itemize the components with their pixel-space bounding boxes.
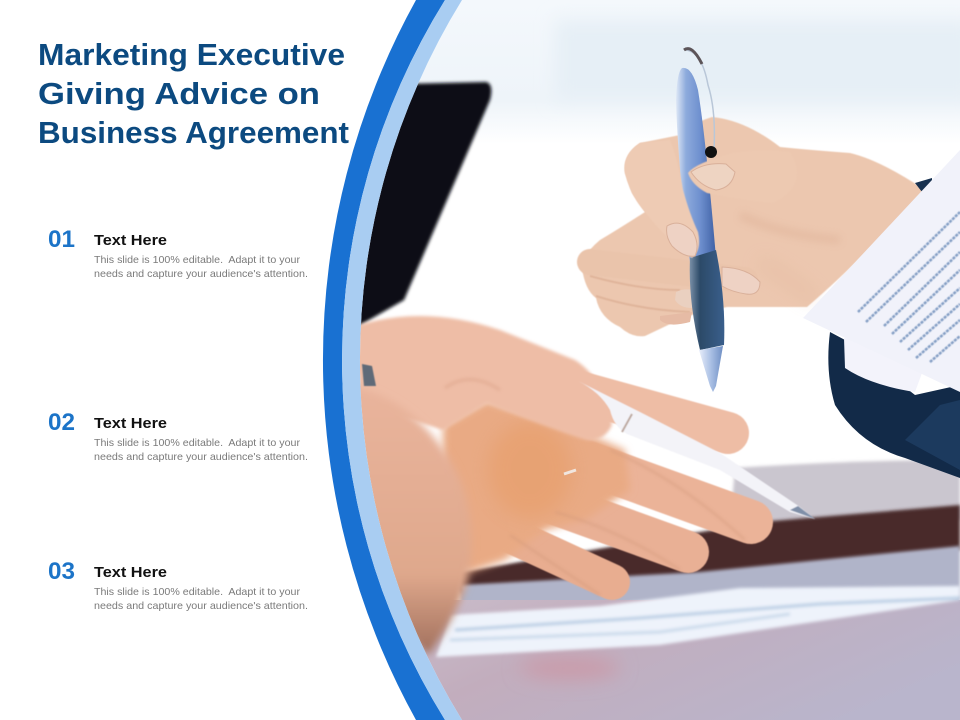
description 03: needs and capture your audience's attention. <box>94 600 308 612</box>
description 03 <box>94 586 308 612</box>
description 01 <box>94 254 308 280</box>
description 01: This slide is 100% editable. Adapt it to your <box>94 254 300 266</box>
list item 02 <box>48 409 308 463</box>
laptop screen <box>355 82 491 328</box>
wrist side <box>360 389 474 658</box>
description 02 <box>94 437 308 463</box>
curved blue band <box>323 0 445 720</box>
description 02: This slide is 100% editable. Adapt it to your <box>94 437 300 449</box>
man's hand with fingers <box>340 316 751 655</box>
list item 03 <box>48 558 308 612</box>
title <box>38 37 349 150</box>
number 03: 03 <box>48 558 75 585</box>
middle finger with nail <box>576 248 592 274</box>
woman's hand behind the pen <box>582 117 925 336</box>
document held in hand <box>803 150 960 392</box>
photo: two people discussing a document with pens <box>340 0 960 720</box>
heading 03: Text Here <box>94 564 167 581</box>
business suit sleeve and shirt cuff <box>828 178 960 478</box>
thumb <box>688 160 710 194</box>
back of hand with thumb <box>350 316 612 440</box>
title: Business Agreement <box>38 115 349 150</box>
document text lines <box>858 212 960 362</box>
description 03: This slide is 100% editable. Adapt it to your <box>94 586 300 598</box>
blue pen <box>676 49 724 392</box>
white pen <box>578 381 815 519</box>
little finger <box>510 535 612 582</box>
finger creases <box>510 450 745 595</box>
heading 02: Text Here <box>94 415 167 432</box>
index finger <box>625 140 699 258</box>
list item 01 <box>48 226 308 280</box>
index finger <box>565 388 728 433</box>
description 02: needs and capture your audience's attention. <box>94 451 308 463</box>
thumb nail <box>691 164 735 190</box>
palm <box>440 400 630 572</box>
number 02: 02 <box>48 409 75 436</box>
middle finger <box>585 462 751 522</box>
description 01: needs and capture your audience's attention. <box>94 268 308 280</box>
curved light blue band <box>342 0 462 720</box>
number 01: 01 <box>48 226 75 253</box>
heading 01: Text Here <box>94 232 167 249</box>
ring finger <box>530 495 688 552</box>
title: Marketing Executive <box>38 37 345 72</box>
title: Giving Advice on <box>38 76 320 111</box>
index finger and thumb over the pen <box>624 142 736 258</box>
index nail <box>667 223 697 256</box>
papers on table <box>436 586 960 657</box>
table surface <box>420 460 960 720</box>
